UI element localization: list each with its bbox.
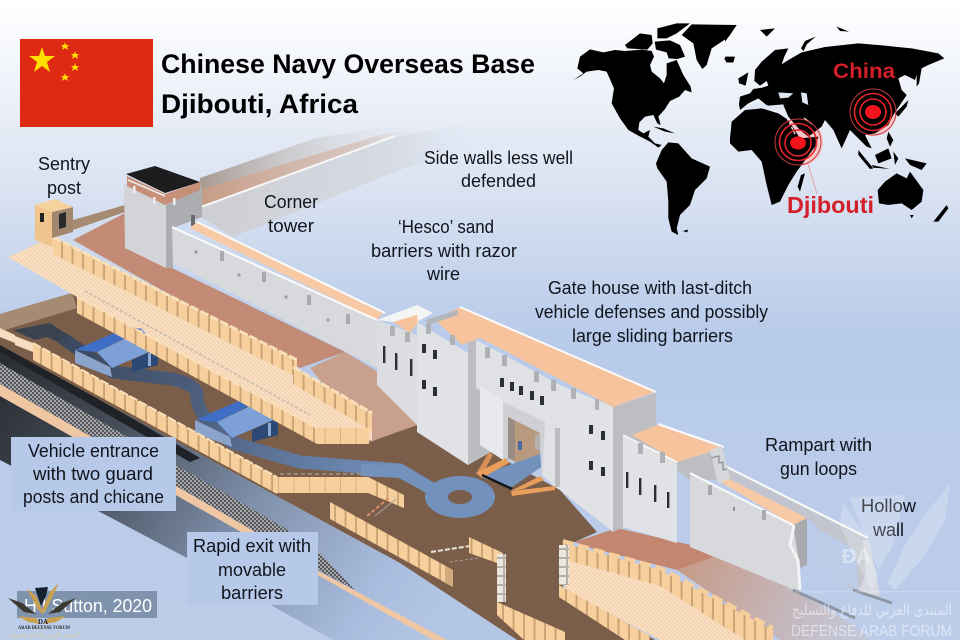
- entrance road and chicane: [13, 323, 440, 493]
- label: Corner tower: tower: [268, 216, 314, 236]
- callout: Vehicle entrance: posts and chicane: [23, 487, 164, 507]
- gate house second block: [417, 322, 468, 465]
- guard post 1: [75, 327, 158, 377]
- barrier row: rapid exit: [330, 497, 478, 587]
- courtyard strip: [73, 213, 417, 442]
- slit windows: [383, 344, 605, 476]
- side wall receding behind the corner tower: [200, 120, 500, 237]
- credit box: H I Sutton, 2020: [24, 596, 152, 616]
- gate house right pier recess: [555, 428, 560, 487]
- sentry post: [35, 199, 125, 247]
- guard post 2: [195, 397, 278, 447]
- watermark logo: lower left: [8, 583, 79, 639]
- label: Rampart: [765, 435, 872, 479]
- gateway opening: [508, 417, 540, 463]
- title: Djibouti, Africa: [161, 89, 359, 119]
- gate pier: [480, 386, 503, 460]
- gate house left roof: [377, 305, 433, 322]
- barrier row: inner front: [317, 428, 369, 444]
- callout: Rapid exit: [187, 532, 318, 605]
- watermark logo: lower left: ARAB DEFENSE FORUM: [18, 625, 71, 631]
- barrier row: vehicle lane outer: [33, 343, 404, 508]
- label: Hollow wall: wall: [872, 520, 904, 540]
- label: Hollow wall: [861, 496, 917, 540]
- label: Side walls: Side walls less well: [424, 148, 573, 168]
- label: Side walls: [424, 148, 573, 191]
- rampart wall from tower to gate house: [172, 222, 385, 368]
- barrier row: lower right upper: [563, 541, 773, 640]
- watermark logo: lower left: المنتدى العربي للدفاع والتسليح: [9, 631, 79, 639]
- gate house right block: [560, 385, 613, 532]
- label: Rampart: Rampart with: [765, 435, 872, 455]
- label: Hesco barriers: ‘Hesco’ sand: [398, 217, 494, 237]
- marker: Djibouti rings: [775, 118, 821, 194]
- credit box: [17, 591, 157, 618]
- ground: perimeter road band and mesh strip: [0, 337, 517, 640]
- barrier column: lower right wire boxes: [559, 545, 569, 585]
- label: Hesco barriers: barriers with razor: [371, 241, 517, 261]
- marker halos behind map: [775, 88, 897, 166]
- label: Rampart: gun loops: [780, 459, 857, 479]
- label: Sentry post: [38, 154, 90, 198]
- gate house rear side: [613, 393, 656, 532]
- label: Gate house: vehicle defenses and possibly: [535, 302, 768, 322]
- world map: Eurasia, Africa and Oceania: [725, 25, 948, 222]
- callout: Vehicle entrance: with two guard: [32, 464, 153, 484]
- merlons: [390, 324, 599, 410]
- gate road: [483, 454, 541, 487]
- marker: China rings: [850, 89, 896, 135]
- tiled ground at lower right: [565, 552, 773, 640]
- gateway frame: [503, 402, 545, 475]
- ground: brown compound floor: [0, 293, 655, 640]
- watermark logo: lower right: [795, 483, 960, 592]
- watermark logo: lower left: DA: [38, 618, 48, 626]
- label: Corner tower: Corner: [264, 192, 318, 212]
- label: Side walls: defended: [461, 171, 536, 191]
- callout: Vehicle entrance: Vehicle entrance: [28, 441, 159, 461]
- label: Corner tower: [264, 192, 318, 236]
- map label: China: China: [833, 60, 895, 83]
- barrier row: courtyard edge: [53, 237, 372, 431]
- flag of China: [20, 39, 153, 127]
- corner tower: [124, 166, 202, 268]
- barrier row: inner edge: [77, 291, 317, 444]
- vehicle barrier wedges and drop bar: [476, 452, 555, 496]
- barrier row: movable barrier section: [469, 537, 565, 640]
- roundabout: [425, 454, 541, 518]
- label: Gate house: Gate house with last-ditch: [548, 278, 752, 298]
- world map: Americas and Greenland: [573, 23, 737, 235]
- map label: Djibouti: Djibouti: [787, 192, 874, 218]
- title: [161, 49, 535, 119]
- label: Gate house: large sliding barriers: [572, 326, 733, 346]
- gate house left block: [377, 320, 417, 425]
- label: Hesco barriers: wire: [426, 264, 460, 284]
- label: Gate house: [535, 278, 768, 346]
- tiled ground between barrier rows: [8, 237, 372, 440]
- callout: Rapid exit: movable: [218, 560, 286, 580]
- title: Chinese Navy Overseas Base: [161, 49, 535, 79]
- barrier row: lower right lower: [559, 585, 650, 640]
- callout: Vehicle entrance: [11, 437, 176, 511]
- gate house: [377, 305, 656, 532]
- watermark text: lower right: [791, 601, 952, 640]
- label: Sentry post: post: [47, 178, 81, 198]
- label: Hesco barriers: [371, 217, 517, 284]
- callout: Rapid exit: barriers: [221, 583, 283, 603]
- watermark logo: lower right: ĐA: [842, 546, 871, 568]
- gate house centre wall: [476, 340, 560, 490]
- callout: Rapid exit: Rapid exit with: [193, 536, 311, 556]
- label: Hollow wall: Hollow: [861, 496, 917, 516]
- ramp ground behind the right wall: [575, 528, 870, 640]
- right tower block: [623, 424, 724, 543]
- barrier: white blocks at the road edge: [0, 328, 33, 352]
- gate house recess: [468, 340, 491, 465]
- gate house main roof: [435, 307, 655, 407]
- ground: raised earth rim: [0, 293, 77, 330]
- right rampart with stairs and hollow wall: [690, 446, 892, 618]
- label: Sentry post: Sentry: [38, 154, 90, 174]
